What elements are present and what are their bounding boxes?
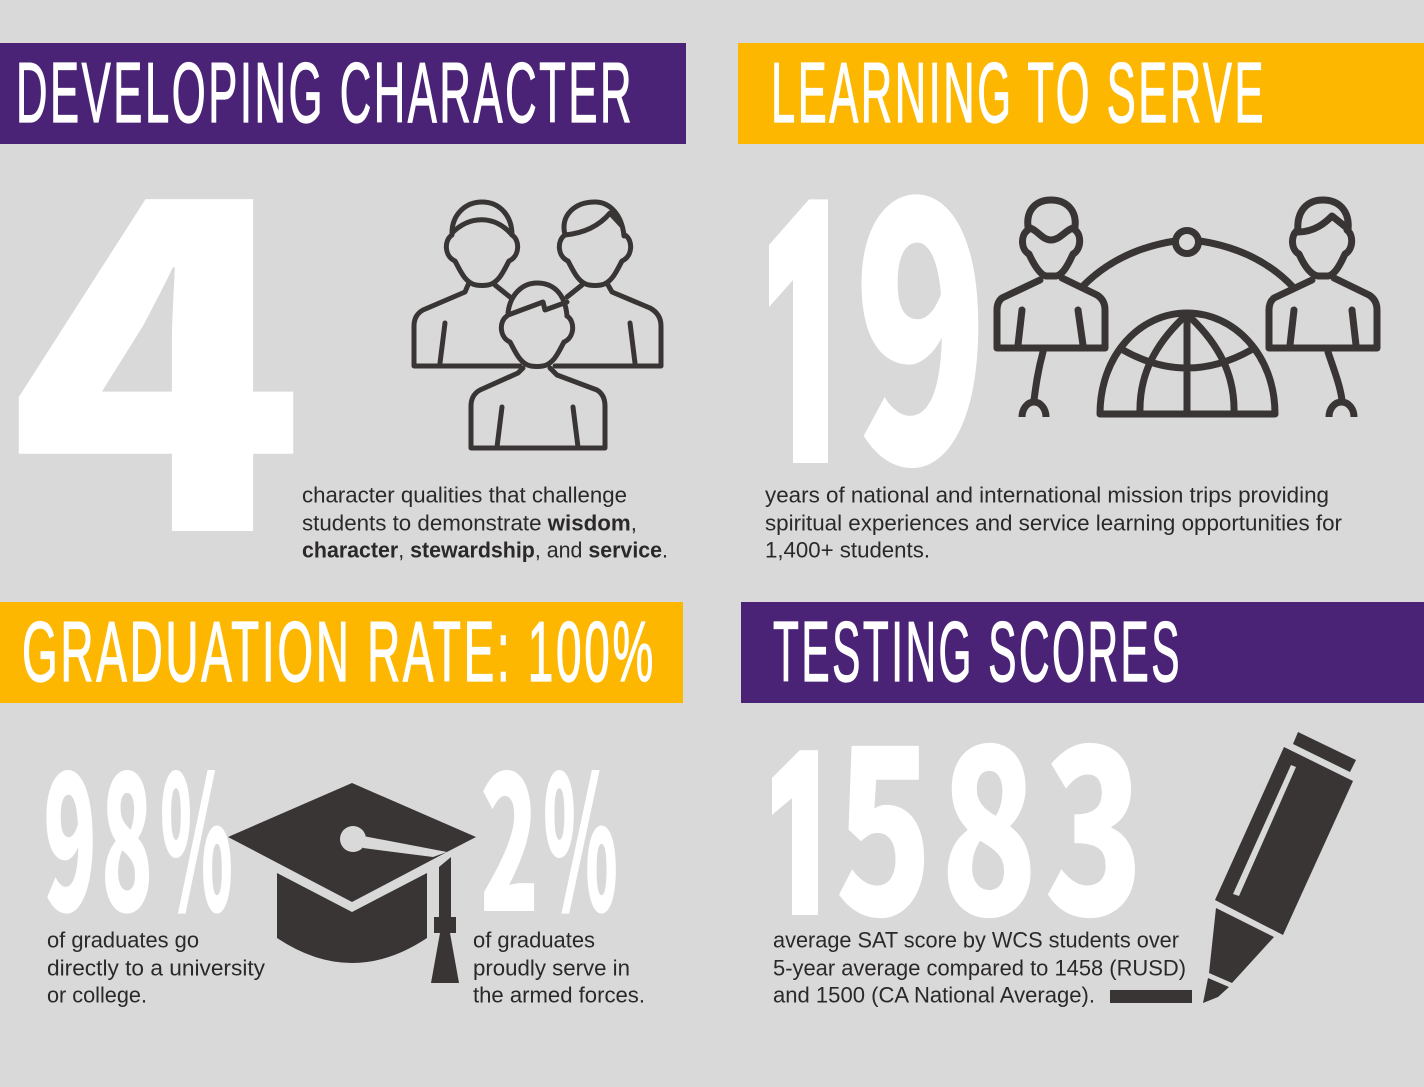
- big number 19: 9: [853, 42, 989, 568]
- panel: developing character: [0, 1, 686, 663]
- big number 1583: 3: [1044, 653, 1144, 981]
- heading: graduation rate: GRADUATION RATE: 100%: [22, 605, 656, 700]
- description: university graduates: or college.: [47, 982, 147, 1007]
- description: armed forces graduates: of graduates: [473, 927, 595, 952]
- description: SAT scores: 5-year average compared to 1458 (RUSD): [773, 955, 1186, 980]
- description: character qualities: students to demonstrate wisdom,: [302, 510, 637, 535]
- icon: pen: [1110, 732, 1356, 1003]
- heading: developing character: [0, 43, 686, 144]
- description: SAT scores: and 1500 (CA National Average).: [773, 982, 1095, 1007]
- big number 19: 1: [724, 42, 884, 568]
- big number 1583: 8: [940, 653, 1038, 981]
- panel: testing scores: [738, 602, 1424, 1007]
- big number 1583: [772, 742, 1135, 918]
- heading: graduation rate: [0, 602, 683, 703]
- icon: people connected around a globe: [997, 200, 1377, 417]
- icon: graduation cap: [228, 783, 476, 983]
- big number 1583: 5: [835, 653, 933, 981]
- description: university graduates: of graduates go: [47, 927, 199, 952]
- icon: three people: [414, 202, 661, 448]
- panel: graduation rate: %: [160, 695, 233, 965]
- big number 19: [769, 194, 978, 468]
- panel: graduation rate: [0, 602, 683, 1007]
- big number 1583: 1: [738, 653, 862, 981]
- big number 98%: 8: [101, 695, 153, 965]
- description: mission trips: 1,400+ students.: [765, 537, 930, 562]
- panel: graduation rate: %: [543, 695, 618, 965]
- description: armed forces graduates: the armed forces.: [473, 982, 645, 1007]
- description: character qualities: character, stewardship, and service.: [302, 537, 668, 562]
- description: SAT scores: average SAT score by WCS students over: [773, 927, 1179, 952]
- description: university graduates: directly to a university: [47, 955, 265, 980]
- big number 98%: 9: [43, 695, 97, 965]
- big number 2%: 2: [480, 695, 539, 965]
- description: mission trips: years of national and international mission trips providing: [765, 482, 1329, 507]
- big number 4: 4: [8, 1, 306, 663]
- description: mission trips: spiritual experiences and service learning opportunities for: [765, 510, 1342, 535]
- heading: developing character: DEVELOPING CHARACTER: [16, 46, 634, 141]
- description: armed forces graduates: proudly serve in: [473, 955, 630, 980]
- panel: learning to serve: [724, 42, 1424, 568]
- description: character qualities: character qualities that challenge: [302, 482, 627, 507]
